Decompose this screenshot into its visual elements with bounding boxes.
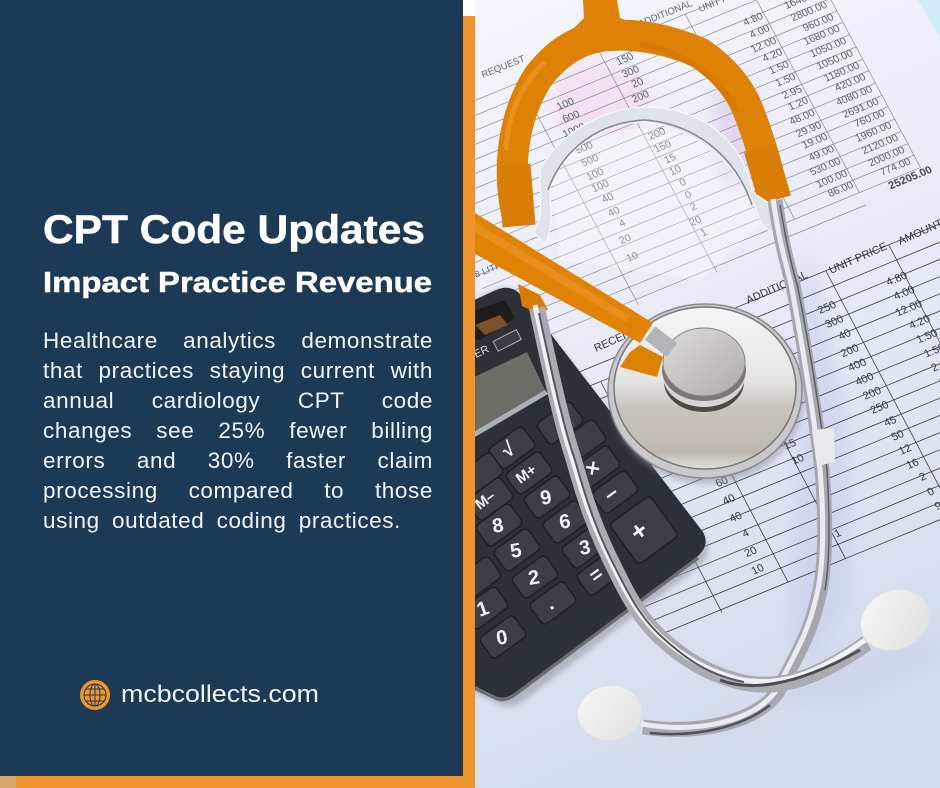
lower invoice table: 40 (728, 510, 744, 525)
upper invoice table: 86.00 (826, 180, 856, 200)
lower invoice table: 1 (832, 527, 844, 540)
metal headset spring (534, 107, 782, 280)
lower invoice table: 200 (839, 342, 861, 360)
upper invoice table: 4.80 (741, 11, 766, 29)
lower invoice table: 60 (714, 475, 730, 490)
upper invoice table: 48.00 (788, 108, 817, 128)
lower invoice table: 2 (917, 471, 929, 484)
upper invoice table: 2.95 (780, 84, 805, 102)
keypad: – (598, 479, 623, 507)
lower invoice table: 45 (882, 414, 899, 429)
lower invoice table: 300 (823, 313, 846, 331)
upper invoice table: 40 (600, 192, 616, 206)
upper invoice table: 600 (561, 109, 582, 125)
upper invoice table: 4.00 (748, 23, 772, 41)
upper invoice table: 150 (615, 51, 636, 68)
lower invoice table: 400 (846, 357, 869, 374)
body text: annual cardiology CPT code (43, 388, 433, 413)
upper invoice table: 2120.00 (860, 133, 901, 157)
keypad (453, 400, 679, 660)
lower invoice table: 1.50 (914, 327, 940, 346)
keypad: × (580, 454, 605, 482)
upper invoice table: 100 (585, 167, 606, 183)
upper invoice table: 200 (630, 89, 652, 105)
lower table column headers: ADDITIONAL (744, 269, 810, 307)
orange horizontal accent bar (16, 776, 475, 788)
upper invoice table: 1.50 (774, 72, 798, 89)
lower invoice table: 60 (706, 457, 723, 473)
upper invoice table: 1 (699, 227, 710, 239)
ear tip right (851, 579, 939, 661)
keypad: . (541, 594, 558, 615)
upper invoice table: 4080.00 (834, 84, 875, 109)
website footer (80, 680, 319, 710)
upper invoice table: 20 (617, 233, 634, 247)
upper invoice table: 960.00 (801, 12, 836, 34)
icon: globe (80, 680, 110, 710)
keypad: 5 (509, 539, 523, 563)
keypad: 9 (539, 486, 553, 510)
keypad: M+ (513, 461, 540, 487)
chrome tube right (641, 199, 835, 734)
lower invoice table: 16 (904, 457, 921, 472)
upper invoice table: 29.90 (794, 120, 824, 140)
keypad: 3 (578, 536, 592, 560)
upper invoice table: 0 (683, 190, 694, 202)
upper invoice table: 49.00 (807, 144, 837, 164)
upper invoice table: 760.00 (852, 108, 887, 130)
lower invoice table: 200 (861, 385, 884, 402)
keypad: + (624, 514, 654, 547)
tan corner accent (0, 776, 16, 788)
body text: using outdated coding practices. (43, 508, 401, 533)
upper invoice table: 10 (625, 250, 641, 264)
upper invoice table: 4 (617, 218, 628, 230)
upper invoice table: 100 (590, 179, 611, 195)
upper invoice table: 12.00 (749, 36, 779, 55)
lower table column headers: RECEIVED (592, 321, 649, 355)
lower invoice table: 40 (721, 492, 737, 507)
lower invoice table: 250 (868, 399, 891, 417)
body text: that practices staying current with (43, 358, 433, 383)
lower invoice table: 4 (740, 527, 751, 540)
upper invoice table: 2000.00 (867, 145, 907, 169)
upper invoice table: 19.00 (800, 132, 830, 151)
upper invoice table: 300 (620, 64, 642, 81)
upper invoice table: 1000 (561, 122, 588, 140)
panel: navy background (0, 0, 463, 776)
lower invoice table: 4.00 (892, 284, 917, 303)
title (43, 208, 432, 299)
upper invoice table: 20 (630, 76, 646, 91)
upper invoice table (398, 0, 938, 355)
upper invoice table: 1180.00 (822, 61, 862, 84)
upper invoice table: 150 (652, 139, 674, 155)
orange binaural tube (506, 0, 775, 226)
lower invoice table: 0 (925, 486, 937, 499)
lower invoice table: 400 (854, 371, 876, 388)
invoice column headers: REQUEST (480, 53, 527, 81)
lower invoice table: 10 (749, 562, 766, 577)
heading line one: CPT Code Updates (43, 208, 425, 252)
lower invoice table: 20 (742, 545, 759, 560)
upper invoice table: 0 (678, 177, 688, 189)
orange vertical accent bar (463, 16, 475, 788)
display (470, 352, 545, 434)
keypad: √ (498, 437, 520, 462)
keypad: 6 (558, 510, 572, 534)
upper invoice table: 530.00 (808, 156, 843, 178)
lower orange tube (475, 213, 672, 377)
heading line two: Impact Practice Revenue (43, 267, 432, 299)
body text: Healthcare analytics demonstrate (43, 328, 433, 353)
invoice column headers (473, 0, 751, 281)
upper invoice table: 1050.00 (815, 48, 855, 72)
lower table column headers (592, 217, 940, 355)
keypad: 8 (491, 514, 505, 538)
upper invoice table: 25205.00 (886, 164, 934, 192)
chrome tube left (535, 305, 867, 686)
body text: processing compared to those (43, 478, 433, 503)
upper invoice table: 774.00 (878, 157, 913, 178)
upper invoice table: 2691.00 (841, 97, 881, 121)
lower invoice table: 12.00 (893, 298, 925, 319)
upper invoice table: 500 (580, 153, 601, 169)
lower invoice table: 50 (889, 428, 906, 444)
lower invoice table: 15 (782, 437, 798, 452)
lower invoice table: 4.20 (907, 313, 932, 332)
upper invoice table: 20 (688, 215, 704, 229)
lower invoice table: 10 (789, 452, 806, 467)
lower invoice table: 4.80 (884, 270, 910, 289)
body text (43, 328, 433, 533)
lower invoice table: 40 (836, 327, 853, 343)
upper invoice table: 100 (555, 96, 577, 113)
lower table column headers: UNIT PRICE (827, 241, 889, 277)
lower invoice table: 12 (897, 442, 914, 458)
upper invoice table: 500 (574, 140, 595, 156)
lower invoice table (523, 190, 940, 641)
keypad: 2 (527, 566, 541, 590)
upper invoice table: 40 (606, 205, 622, 219)
lower invoice table: 250 (816, 299, 838, 317)
upper invoice table: 200 (647, 126, 668, 143)
upper invoice table: 1.50 (767, 60, 791, 77)
calculator (453, 288, 708, 706)
body text: changes see 25% fewer billing (43, 418, 433, 443)
upper invoice table: 420.00 (833, 72, 868, 94)
upper invoice table: 1680.00 (802, 24, 842, 48)
upper invoice table: 4.20 (761, 47, 785, 65)
upper invoice table: 100.00 (815, 169, 850, 191)
body text: errors and 30% faster claim (43, 448, 433, 473)
upper invoice table: 15 (662, 152, 678, 166)
keypad: 0 (495, 626, 509, 650)
upper invoice table: 2800.00 (789, 0, 830, 24)
upper invoice table: 1.20 (787, 96, 811, 113)
ear tip left (575, 682, 645, 744)
upper invoice table: 2 (689, 202, 699, 213)
solar panel and brand plate (470, 300, 521, 361)
keypad: = (585, 563, 608, 587)
upper invoice table: 1050.00 (808, 36, 849, 60)
upper invoice table: 10 (668, 164, 684, 178)
website address: mcbcollects.com (121, 681, 319, 708)
photo: stethoscope and calculator on itemised invoices (475, 0, 940, 788)
paper background (475, 0, 940, 788)
upper invoice table: 1960.00 (854, 120, 894, 145)
stethoscope chest piece (608, 304, 804, 484)
